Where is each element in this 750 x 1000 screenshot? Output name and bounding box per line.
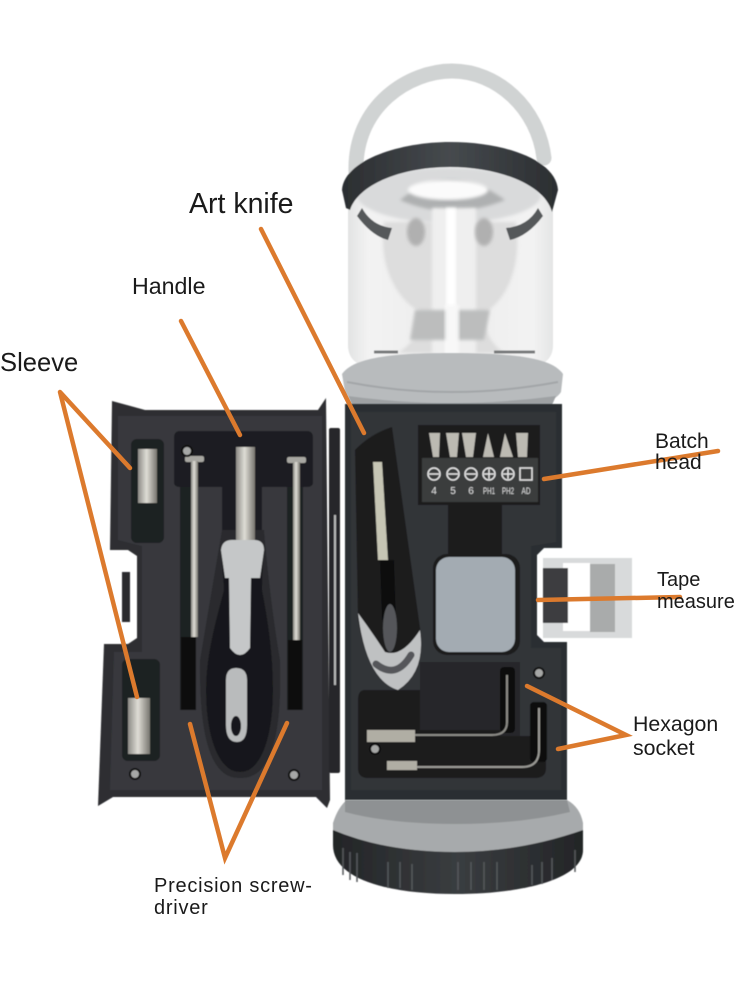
clip in notch (122, 572, 130, 622)
hinge (329, 428, 340, 773)
label: art knife: Art knife (189, 188, 294, 220)
lantern handle (356, 71, 544, 172)
label: sleeve: Sleeve (0, 349, 78, 377)
sleeve recess bottom (122, 659, 160, 761)
label: hexagon socket: socket (633, 736, 695, 760)
lantern black ring (342, 142, 558, 212)
label: tape measure: measure (657, 591, 735, 613)
line: batch head (544, 451, 718, 479)
line: art knife (261, 229, 364, 433)
sleeve bottom (128, 698, 150, 754)
label: precision screwdriver: driver (154, 897, 209, 919)
screws (370, 668, 544, 754)
tape measure clip (543, 558, 632, 638)
handle screwdriver (206, 447, 273, 772)
label: batch head: Batch (655, 430, 709, 453)
bit labels: PH2 (502, 486, 514, 496)
left case panel (98, 398, 340, 808)
sleeve top (138, 449, 157, 503)
bit labels: 4 (431, 486, 437, 497)
label: hexagon socket: Hexagon (633, 712, 718, 736)
handle recess (200, 530, 280, 778)
hex keys (358, 662, 547, 778)
bit icons (428, 468, 532, 480)
bit holder (418, 425, 540, 555)
lines: hexagon socket (527, 686, 626, 749)
bit labels: 5 (450, 486, 456, 497)
precision screwdriver right (287, 457, 306, 710)
bit labels: AD (522, 486, 531, 496)
label: precision screwdriver: Precision screw- (154, 875, 313, 897)
base ribs (343, 848, 575, 890)
label: tape measure: Tape (657, 569, 700, 591)
panel screws (130, 446, 299, 780)
tape measure (433, 554, 520, 655)
right case panel (345, 404, 632, 800)
screwdriver recess (174, 431, 313, 530)
sleeve recess top (131, 439, 164, 543)
label: handle: Handle (132, 273, 205, 299)
lantern inner lamp (357, 167, 543, 360)
line: tape measure (538, 597, 680, 600)
orange callout lines (60, 229, 718, 858)
bit labels: 6 (468, 486, 474, 497)
label: batch head: head (655, 451, 702, 474)
precision screwdriver left (181, 456, 204, 710)
utility knife (355, 427, 421, 690)
slots (180, 487, 303, 710)
lines: sleeve (60, 392, 137, 697)
lines: precision screwdriver (190, 723, 287, 858)
line: handle (181, 321, 240, 435)
bits (429, 433, 528, 457)
bit labels (431, 486, 531, 497)
lantern base (333, 800, 583, 894)
lantern glass (348, 195, 553, 368)
lantern grey collar (342, 353, 563, 404)
lantern (342, 71, 563, 405)
bit labels: PH1 (483, 486, 495, 496)
